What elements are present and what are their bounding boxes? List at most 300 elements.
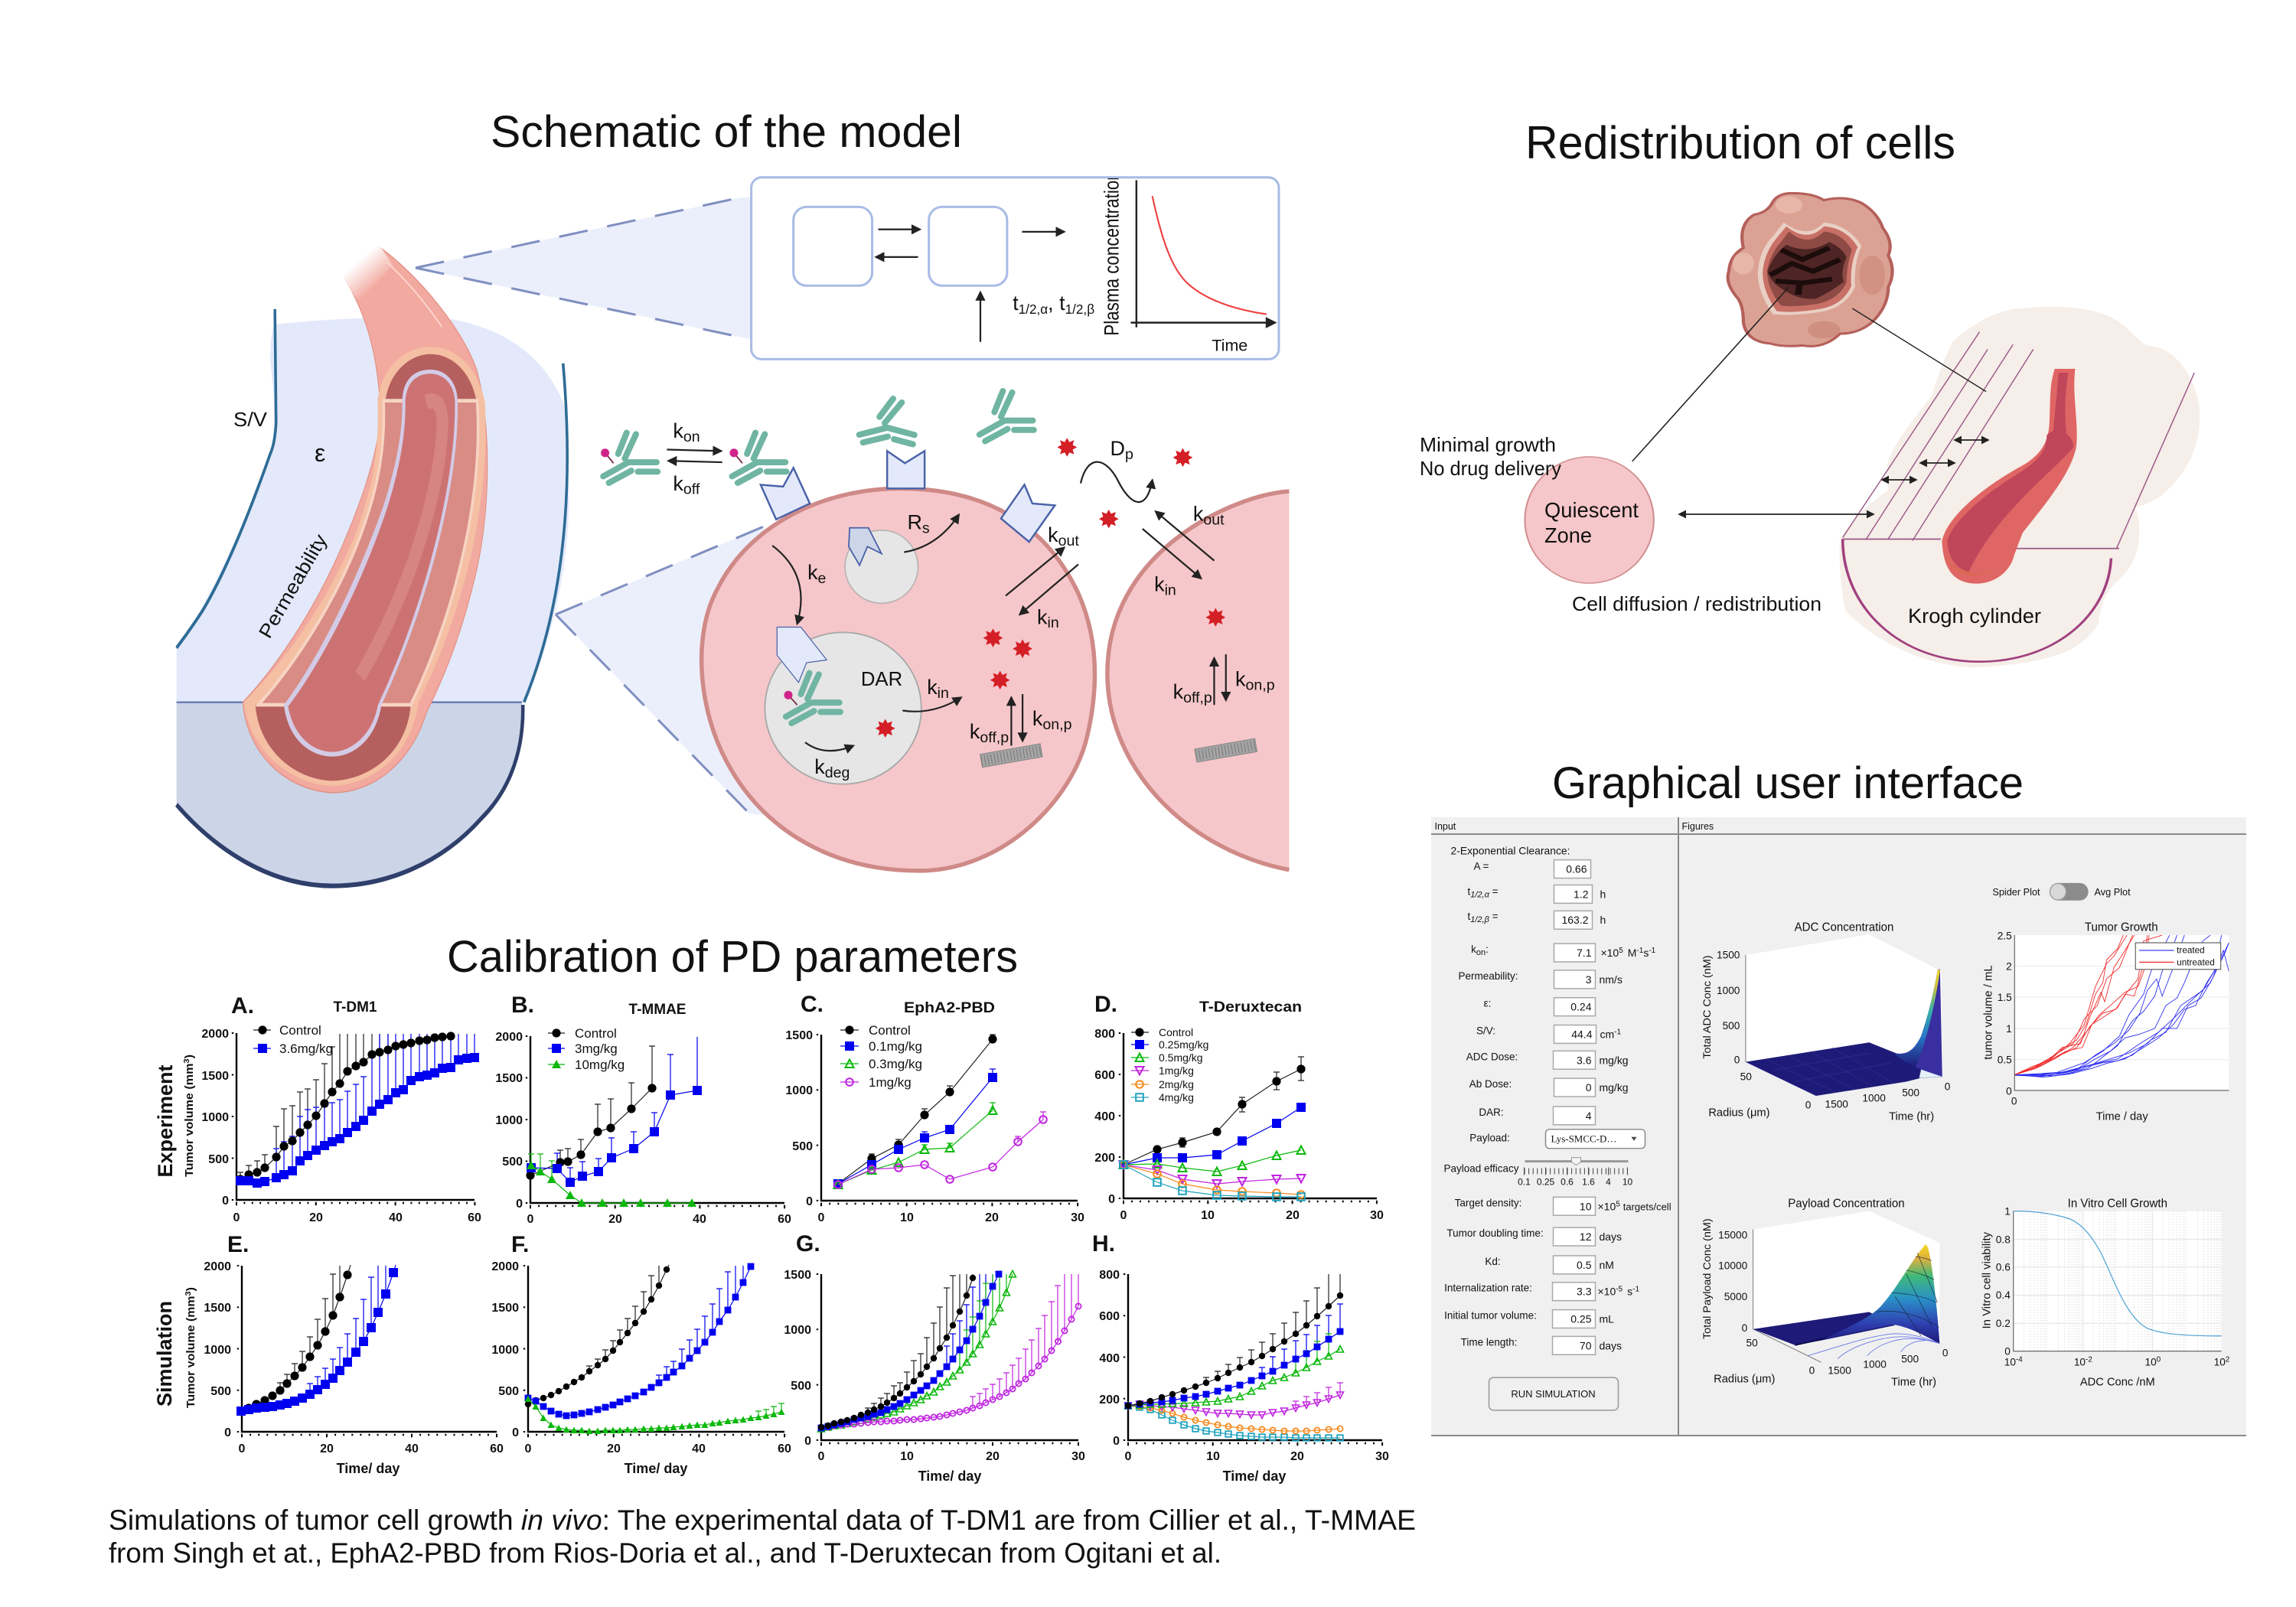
caption: Simulations of tumor cell growth in vivo: The experimental data of T-DM1 are from Cillier et al., T-MMAE — [109, 1504, 1416, 1536]
rate constant labels: off,p — [980, 729, 1009, 746]
chart G: EphA2-PBD simulation — [784, 1231, 1085, 1484]
chart H: T-Deruxtecan simulation: 0 — [1113, 1435, 1120, 1448]
parameter values: 163.2 — [1561, 914, 1589, 926]
title: Calibration of PD parameters: Calibration of PD parameters — [447, 932, 1018, 982]
run simulation button — [1489, 1377, 1618, 1410]
in vitro cell growth plot: 10 — [2214, 1355, 2226, 1368]
payload concentration 3D plot: 1000 — [1863, 1358, 1887, 1371]
neighbouring tumor cell — [1107, 491, 1289, 870]
parameter units: ×10 — [1601, 947, 1619, 959]
ADC concentration 3D plot: Time (hr) — [1889, 1110, 1934, 1123]
chart D: T-Deruxtecan experiment: 4mg/kg — [1159, 1091, 1194, 1103]
chart G: EphA2-PBD simulation: 500 — [791, 1380, 811, 1393]
in vitro cell growth plot: 10 — [2004, 1355, 2016, 1368]
parameter units: mL — [1600, 1313, 1614, 1325]
chart C: EphA2-PBD experiment: 0.1mg/kg — [869, 1039, 922, 1054]
chart G: EphA2-PBD simulation: 0 — [804, 1435, 811, 1448]
chart B: T-MMAE experiment: Control — [575, 1026, 617, 1041]
cylinder outlines — [177, 309, 567, 886]
chart C: EphA2-PBD experiment: 500 — [792, 1140, 813, 1153]
in vitro cell growth plot: ADC Conc /nM — [2080, 1376, 2155, 1388]
parameter labels: 1/2,β — [1470, 915, 1489, 924]
payload efficacy slider — [1518, 1158, 1633, 1187]
in vitro cell growth plot: 0.8 — [1996, 1233, 2011, 1245]
chart G: EphA2-PBD simulation: 10 — [900, 1450, 914, 1463]
chart H: T-Deruxtecan simulation: 0 — [1125, 1450, 1132, 1463]
payload concentration 3D plot: 50 — [1746, 1337, 1758, 1349]
parameter labels: Initial tumor volume: — [1444, 1310, 1537, 1322]
chart B: T-MMAE experiment: 60 — [778, 1213, 791, 1226]
ADC concentration 3D plot: 1000 — [1717, 984, 1740, 996]
rate constant labels: k — [1154, 572, 1165, 595]
parameter units — [1598, 888, 1671, 1351]
payload concentration 3D plot: 500 — [1901, 1353, 1919, 1365]
chart C: EphA2-PBD experiment: 20 — [985, 1211, 999, 1224]
parameter units: mg/kg — [1600, 1081, 1629, 1094]
row label: Experiment: ) — [184, 1054, 196, 1058]
ADC concentration 3D plot: 500 — [1723, 1019, 1740, 1032]
parameter units: days — [1600, 1339, 1622, 1351]
parameter units: targets/cell — [1623, 1201, 1671, 1212]
parameter units: ×10 — [1598, 1200, 1616, 1212]
spider plot toggle: Avg Plot — [2094, 886, 2131, 898]
payload concentration 3D plot: 0 — [1742, 1322, 1748, 1334]
rate constant labels: in — [1165, 582, 1176, 598]
parameter values: 0.66 — [1566, 863, 1587, 875]
parameter labels: ε: — [1484, 998, 1491, 1009]
payload concentration 3D plot — [1701, 1198, 1949, 1388]
panel: redistribution of cells drawing — [1525, 193, 2200, 667]
payload dropdown — [1546, 1129, 1645, 1149]
plasma concentration mini-chart: Time — [1212, 336, 1247, 354]
ADC concentration 3D plot: 50 — [1740, 1070, 1752, 1083]
in vitro cell growth plot: In Vitro Cell Growth — [2068, 1198, 2167, 1211]
rate constant labels — [673, 419, 1275, 781]
rate constant labels: k — [970, 720, 980, 743]
chart F: T-MMAE simulation: 500 — [498, 1385, 519, 1398]
chart G: EphA2-PBD simulation: 0 — [818, 1450, 825, 1463]
chart E: T-DM1 simulation: E. — [227, 1232, 249, 1257]
chart C: EphA2-PBD experiment: 0 — [806, 1195, 813, 1208]
parameter values: 3.6 — [1577, 1054, 1592, 1066]
panel: graphical user interface — [1431, 817, 2246, 1436]
in vitro cell growth plot: 10 — [2145, 1355, 2157, 1368]
payload concentration 3D plot: 0 — [1942, 1347, 1949, 1359]
run simulation button: RUN SIMULATION — [1511, 1388, 1596, 1400]
rate constant labels: k — [1235, 668, 1245, 691]
parameter values: 3 — [1586, 973, 1592, 986]
quiescent zone circle — [1525, 457, 1654, 583]
row label: Simulation: 3 — [184, 1291, 193, 1296]
in vitro cell growth plot: 10 — [2074, 1355, 2086, 1368]
rate constant labels: k — [673, 419, 683, 442]
chart G: EphA2-PBD simulation: 30 — [1071, 1450, 1085, 1463]
rate constant labels: s — [922, 520, 930, 536]
redistribution double arrows — [1679, 440, 1988, 514]
PK compartment box: t — [1013, 292, 1019, 315]
zoom cone: tissue to cells — [556, 526, 765, 816]
chart B: T-MMAE experiment: T-MMAE — [629, 1002, 686, 1018]
chart A: T-DM1 experiment — [201, 993, 481, 1224]
row label: Simulation — [153, 1287, 197, 1408]
parameter labels — [1444, 861, 1544, 1348]
rate constant labels: deg — [825, 764, 850, 781]
chart F: T-MMAE simulation: 0 — [525, 1442, 532, 1455]
chart C: EphA2-PBD experiment: 1500 — [785, 1029, 813, 1042]
payload efficacy slider: 4 — [1606, 1176, 1611, 1187]
ADC concentration 3D plot: Total ADC Conc (nM) — [1701, 955, 1714, 1059]
zoom cone: vessel to PK box — [416, 197, 754, 340]
chart C: EphA2-PBD experiment: 1000 — [785, 1084, 813, 1097]
parameter values: 3.3 — [1577, 1286, 1592, 1298]
parameter units: M — [1628, 947, 1636, 959]
chart F: T-MMAE simulation — [491, 1232, 791, 1476]
parameter units: -1 — [1636, 947, 1644, 955]
parameter values: 0 — [1586, 1081, 1592, 1094]
rate constant labels: k — [814, 755, 825, 778]
chart H: T-Deruxtecan simulation: 400 — [1099, 1352, 1120, 1365]
chart A: T-DM1 experiment: 1500 — [201, 1070, 229, 1083]
parameter units: cm — [1600, 1028, 1614, 1040]
chart F: T-MMAE simulation: 40 — [692, 1442, 706, 1455]
parameter labels: t — [1467, 885, 1470, 897]
ADC concentration 3D plot: 1000 — [1862, 1091, 1886, 1103]
payload efficacy slider: 0.25 — [1537, 1176, 1555, 1187]
parameter units: 5 — [1619, 947, 1623, 955]
payload efficacy slider: 1.6 — [1582, 1176, 1595, 1187]
label: Minimal growth No drug delivery: No drug delivery — [1420, 457, 1561, 480]
chart A: T-DM1 experiment: 60 — [468, 1211, 481, 1224]
payload dropdown: Lys-SMCC-D… — [1551, 1133, 1616, 1145]
parameter labels: Payload: — [1469, 1133, 1510, 1144]
panel: vessel in tissue — [177, 232, 569, 886]
chart F: T-MMAE simulation: 2000 — [491, 1260, 519, 1273]
half cylinder base — [177, 702, 522, 886]
parameter labels: t — [1467, 911, 1470, 922]
chart D: T-Deruxtecan experiment: Control — [1159, 1026, 1193, 1038]
label: Quiescent Zone: Quiescent — [1544, 498, 1639, 522]
chart D: T-Deruxtecan experiment: D. — [1094, 992, 1117, 1017]
tumor growth spider plot — [1982, 921, 2229, 1123]
ADC concentration 3D plot: 1500 — [1717, 948, 1740, 960]
tumor growth spider plot: tumor volume / mL — [1982, 965, 1994, 1060]
chart D: T-Deruxtecan experiment: 10 — [1201, 1209, 1215, 1222]
parameter values: 10 — [1580, 1200, 1592, 1212]
in vitro cell growth plot: In Vitro cell viability — [1981, 1231, 1993, 1328]
main tumor cell — [702, 488, 1095, 871]
rate constant labels: D — [1110, 437, 1125, 460]
chart E: T-DM1 simulation: 60 — [490, 1442, 504, 1455]
ADC concentration 3D plot: 0 — [1945, 1080, 1951, 1093]
parameter labels: Payload efficacy — [1444, 1163, 1519, 1175]
chart A: T-DM1 experiment: T-DM1 — [334, 999, 377, 1015]
spider plot toggle — [1992, 883, 2131, 901]
label: S/V: S/V — [233, 408, 268, 431]
parameter values — [1561, 863, 1593, 1351]
parameter values: 0.25 — [1570, 1313, 1592, 1325]
kinetic arrows — [667, 450, 1226, 751]
chart D: T-Deruxtecan experiment: 800 — [1094, 1028, 1115, 1041]
row label: Experiment: 3 — [183, 1058, 191, 1064]
chart F: T-MMAE simulation: 1000 — [491, 1344, 519, 1357]
parameter labels: Tumor doubling time: — [1446, 1227, 1544, 1239]
parameter values: 1.2 — [1574, 888, 1589, 900]
title: Schematic of the model: Schematic of the model — [491, 107, 962, 157]
row label: Simulation: Simulation — [153, 1301, 176, 1407]
rate constant labels: k — [1048, 523, 1058, 546]
chart A: T-DM1 experiment: 40 — [389, 1211, 403, 1224]
chart F: T-MMAE simulation: 0 — [512, 1426, 519, 1439]
rate constant labels: off — [683, 481, 700, 498]
chart C: EphA2-PBD experiment: Control — [869, 1023, 911, 1038]
chart B: T-MMAE experiment: 1000 — [495, 1114, 523, 1127]
ADC concentration 3D plot: 500 — [1902, 1086, 1919, 1098]
rate constant labels: on — [683, 429, 700, 445]
tissue interstitium region — [177, 318, 569, 702]
chart A: T-DM1 experiment: Control — [279, 1023, 321, 1038]
label: Quiescent Zone: Zone — [1544, 523, 1592, 547]
parameter labels: k — [1471, 944, 1476, 955]
chart F: T-MMAE simulation: Time/ day — [625, 1461, 687, 1476]
plasma concentration mini-chart — [1101, 171, 1275, 354]
parameter units: h — [1600, 914, 1606, 926]
chart E: T-DM1 simulation: 0 — [224, 1426, 231, 1439]
input boxes — [1552, 860, 1596, 1354]
chart A: T-DM1 experiment: 0 — [233, 1211, 240, 1224]
chart F: T-MMAE simulation: 20 — [607, 1442, 621, 1455]
chart B: T-MMAE experiment: 0 — [527, 1213, 534, 1226]
ADC concentration 3D plot: 1500 — [1825, 1097, 1848, 1110]
chart A: T-DM1 experiment: 20 — [309, 1211, 323, 1224]
parameter values: 44.4 — [1571, 1028, 1593, 1040]
ADC concentration 3D plot: 0 — [1805, 1098, 1812, 1110]
rate constant labels: k — [1032, 707, 1042, 730]
chart D: T-Deruxtecan experiment: 0 — [1108, 1193, 1115, 1206]
chart F: T-MMAE simulation: 1500 — [491, 1302, 519, 1315]
chart B: T-MMAE experiment: B. — [511, 993, 534, 1018]
parameter units: mg/kg — [1600, 1054, 1629, 1066]
tumor growth spider plot: 0.5 — [1998, 1054, 2012, 1066]
chart G: EphA2-PBD simulation: 1000 — [784, 1324, 811, 1337]
row label: Experiment: Experiment — [154, 1064, 177, 1178]
blood vessel — [243, 232, 488, 793]
rate constant labels: p — [1125, 446, 1133, 463]
receptors on cell surface — [761, 451, 1055, 542]
input column: Input — [1435, 821, 1456, 832]
figures column — [1701, 883, 2229, 1388]
parameter values: 12 — [1580, 1231, 1592, 1243]
tumor growth spider plot: Tumor Growth — [2085, 921, 2158, 934]
Krogh cylinder tissue blob — [1840, 307, 2200, 667]
parameter units: -1 — [1649, 947, 1656, 955]
spider plot toggle: Spider Plot — [1992, 886, 2040, 898]
parameter values: 7.1 — [1577, 947, 1592, 959]
parameter values: 4 — [1586, 1110, 1592, 1122]
rate constant labels: k — [807, 561, 818, 584]
parameter units: 5 — [1616, 1200, 1620, 1208]
tumor cross-section — [1728, 193, 1893, 346]
chart A: T-DM1 experiment: A. — [231, 993, 254, 1019]
chart G: EphA2-PBD simulation: Time/ day — [918, 1468, 981, 1484]
caption: from Singh et at., EphA2-PBD from Rios-Doria et al., and T-Deruxtecan from Ogitani et al. — [109, 1537, 1221, 1569]
chart H: T-Deruxtecan simulation: 200 — [1099, 1393, 1120, 1407]
label: Cell diffusion / redistribution: Cell diffusion / redistribution — [1572, 592, 1821, 615]
ADC concentration 3D plot: Radius (μm) — [1708, 1107, 1770, 1119]
chart C: EphA2-PBD experiment: 0 — [818, 1211, 825, 1224]
chart F: T-MMAE simulation: 60 — [778, 1442, 791, 1455]
chart A: T-DM1 experiment: 0 — [222, 1195, 229, 1208]
in vitro cell growth plot — [1981, 1198, 2229, 1388]
rate constant labels: k — [673, 472, 683, 495]
tumor growth spider plot: 1.5 — [1998, 991, 2012, 1003]
label: Minimal growth No drug delivery: Minimal growth — [1420, 433, 1556, 456]
chart C: EphA2-PBD experiment: 1mg/kg — [869, 1075, 912, 1090]
parameter units: h — [1600, 888, 1606, 900]
label: epsilon: ε — [315, 439, 325, 467]
payload concentration 3D plot: Time (hr) — [1891, 1376, 1936, 1388]
chart B: T-MMAE experiment — [495, 993, 791, 1226]
chart A: T-DM1 experiment: 1000 — [201, 1111, 229, 1124]
payload efficacy slider: 0.1 — [1518, 1176, 1531, 1187]
payload concentration 3D plot: Payload Concentration — [1788, 1198, 1905, 1211]
parameter values: 0.24 — [1570, 1001, 1592, 1013]
chart B: T-MMAE experiment: 1500 — [495, 1072, 523, 1085]
PK compartment box: 1/2,α — [1019, 302, 1048, 317]
parameter labels: = — [1489, 911, 1499, 922]
rate constant labels: DAR — [861, 669, 902, 690]
chart B: T-MMAE experiment: 2000 — [495, 1031, 523, 1044]
in vitro cell growth plot: -4 — [2016, 1356, 2023, 1364]
in vitro cell growth plot: 0 — [2157, 1356, 2161, 1364]
parameter labels: Internalization rate: — [1444, 1283, 1532, 1294]
parameter units: s — [1627, 1286, 1632, 1298]
chart D: T-Deruxtecan experiment: 0.5mg/kg — [1159, 1051, 1203, 1064]
chart C: EphA2-PBD experiment: C. — [801, 992, 823, 1017]
in vitro cell growth plot: -2 — [2086, 1356, 2092, 1364]
chart D: T-Deruxtecan experiment — [1094, 992, 1384, 1222]
parameter values: 0.5 — [1577, 1259, 1592, 1271]
rate constant labels: in — [938, 685, 949, 702]
PK compartment box — [752, 178, 1279, 359]
tumor growth spider plot: 2 — [2006, 960, 2012, 972]
chart G: EphA2-PBD simulation: G. — [796, 1231, 820, 1257]
tumor growth spider plot: Time / day — [2096, 1110, 2148, 1123]
connector lines — [1632, 287, 1986, 461]
input column: 2-Exponential Clearance: — [1451, 846, 1570, 857]
chart C: EphA2-PBD experiment: 10 — [900, 1211, 914, 1224]
chart F: T-MMAE simulation: F. — [511, 1232, 529, 1257]
chart H: T-Deruxtecan simulation: 10 — [1206, 1450, 1220, 1463]
parameter labels: ADC Dose: — [1466, 1051, 1518, 1062]
parameter labels: Kd: — [1485, 1256, 1501, 1267]
parameter units: ×10 — [1598, 1286, 1616, 1298]
label: Permeability: Permeability — [255, 530, 331, 642]
chart D: T-Deruxtecan experiment: 400 — [1094, 1110, 1115, 1123]
rate constant labels: R — [907, 511, 922, 534]
payload concentration 3D plot: 15000 — [1718, 1228, 1748, 1240]
payload concentration 3D plot: 0 — [1809, 1364, 1815, 1377]
tumor growth spider plot: 1 — [2006, 1022, 2012, 1035]
panel: cell-level ADC mechanism — [601, 171, 1289, 871]
chart H: T-Deruxtecan simulation: Time/ day — [1223, 1468, 1286, 1484]
chart D: T-Deruxtecan experiment: 0 — [1120, 1209, 1127, 1222]
rate constant labels: off,p — [1183, 689, 1212, 706]
parameter labels: A = — [1474, 861, 1489, 872]
chart E: T-DM1 simulation: 20 — [320, 1442, 334, 1455]
parameter units: -5 — [1616, 1286, 1623, 1294]
rate constant labels: out — [1203, 511, 1225, 528]
payload concentration 3D plot: 10000 — [1718, 1259, 1748, 1271]
row label: Experiment: Tumor volume (mm — [184, 1075, 196, 1177]
chart A: T-DM1 experiment: 3.6mg/kg — [279, 1041, 333, 1056]
chart G: EphA2-PBD simulation: 1500 — [784, 1269, 811, 1282]
parameter labels: 1/2,α — [1470, 890, 1490, 899]
chart E: T-DM1 simulation — [204, 1232, 504, 1476]
chart B: T-MMAE experiment: 20 — [608, 1213, 622, 1226]
payload concentration 3D plot: 1500 — [1828, 1364, 1851, 1377]
parameter labels: : — [1486, 944, 1489, 955]
row label: Experiment — [154, 1054, 196, 1178]
rate constant labels: out — [1058, 533, 1079, 549]
chart G: EphA2-PBD simulation: 20 — [986, 1450, 1000, 1463]
rate constant labels: on,p — [1042, 716, 1072, 733]
parameter units: -1 — [1614, 1028, 1622, 1036]
ADC concentration 3D plot: 0 — [1734, 1054, 1740, 1066]
parameter labels: DAR: — [1479, 1107, 1504, 1118]
label: Minimal growth No drug delivery — [1420, 433, 1561, 480]
chart D: T-Deruxtecan experiment: T-Deruxtecan — [1199, 999, 1302, 1015]
chart H: T-Deruxtecan simulation: 30 — [1375, 1450, 1389, 1463]
chart H: T-Deruxtecan simulation: 600 — [1099, 1310, 1120, 1323]
parameter units: nM — [1600, 1259, 1614, 1271]
input column — [1435, 821, 1714, 1410]
payload efficacy slider: 10 — [1623, 1176, 1633, 1187]
chart D: T-Deruxtecan experiment: 1mg/kg — [1159, 1064, 1194, 1077]
chart D: T-Deruxtecan experiment: 20 — [1286, 1209, 1300, 1222]
parameter values: 70 — [1580, 1339, 1592, 1351]
parameter labels: Permeability: — [1459, 970, 1518, 982]
capillary vessel — [1942, 369, 2077, 584]
parameter labels: Target density: — [1455, 1197, 1521, 1208]
chart B: T-MMAE experiment: 40 — [693, 1213, 706, 1226]
chart E: T-DM1 simulation: Time/ day — [337, 1461, 400, 1476]
chart H: T-Deruxtecan simulation: 20 — [1290, 1450, 1304, 1463]
in vitro cell growth plot: 0.2 — [1996, 1317, 2011, 1329]
chart A: T-DM1 experiment: 500 — [208, 1153, 229, 1166]
payload concentration 3D plot: Radius (μm) — [1714, 1373, 1775, 1386]
chart D: T-Deruxtecan experiment: 2mg/kg — [1159, 1078, 1194, 1090]
chart E: T-DM1 simulation: 40 — [405, 1442, 419, 1455]
parameter labels: = — [1489, 885, 1499, 897]
PK compartment box: 1/2,β — [1065, 302, 1094, 317]
rate constant labels: k — [1193, 503, 1203, 526]
in vitro cell growth plot: 1 — [2004, 1205, 2011, 1217]
lysosome vesicle — [765, 627, 921, 784]
rate constant labels: k — [1173, 680, 1183, 703]
payload efficacy slider: 0.6 — [1561, 1176, 1574, 1187]
tumor growth spider plot: 2.5 — [1998, 929, 2012, 942]
chart E: T-DM1 simulation: 1500 — [204, 1302, 231, 1315]
parameter units: nm/s — [1600, 973, 1623, 986]
rate constant labels: in — [1048, 614, 1059, 631]
tumor growth spider plot: 0 — [2006, 1084, 2012, 1097]
tumor growth spider plot: 0 — [2011, 1094, 2017, 1107]
chart E: T-DM1 simulation: 2000 — [204, 1260, 231, 1273]
parameter labels: on — [1476, 948, 1486, 957]
chart C: EphA2-PBD experiment: EphA2-PBD — [904, 1000, 995, 1016]
chart B: T-MMAE experiment: 0 — [516, 1198, 523, 1211]
row label: Simulation: Tumor volume (mm — [185, 1306, 197, 1408]
